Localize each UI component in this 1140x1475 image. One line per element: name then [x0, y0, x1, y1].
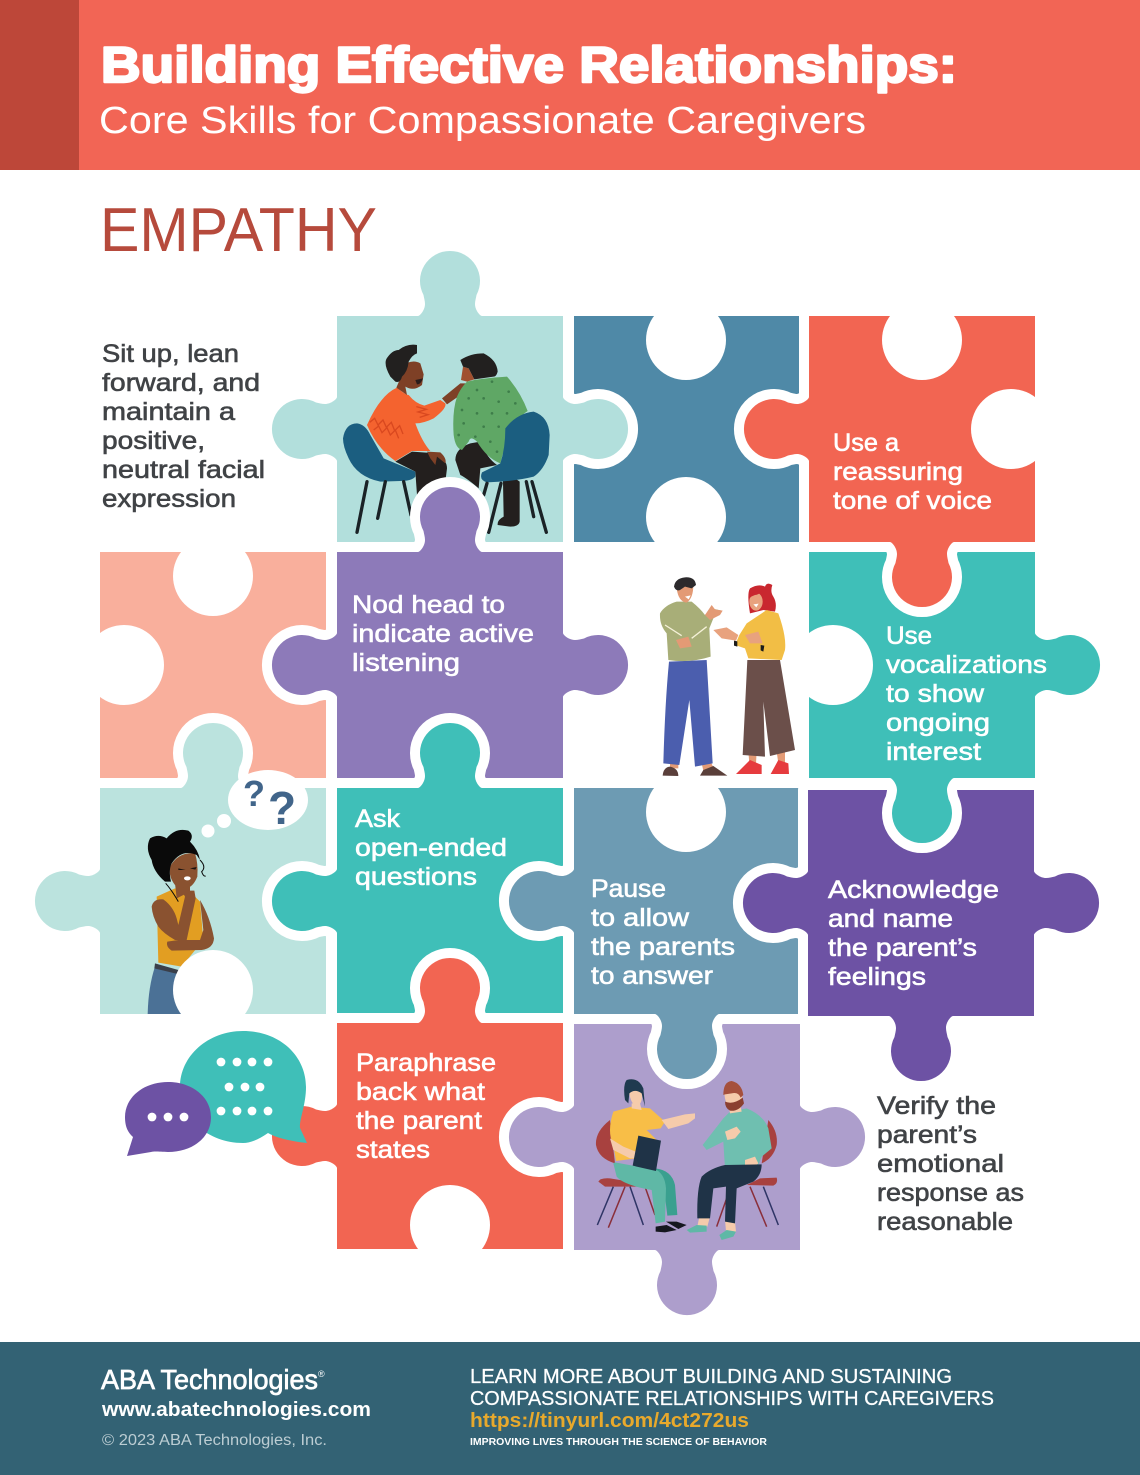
illustration: two people seated, one comforting the other — [343, 345, 550, 532]
puzzle piece: steel blue — [574, 300, 800, 557]
puzzle piece: lavender with illustration — [509, 1024, 865, 1315]
text: verify: emotional — [877, 1150, 1004, 1178]
link: https://tinyurl.com/4ct272us — [470, 1410, 749, 1432]
text: sit up: forward, and — [102, 369, 260, 397]
text: acknowledge: the parent’s — [828, 934, 977, 962]
text: nod head: indicate active — [352, 620, 534, 648]
text: sit up: neutral facial — [102, 456, 265, 484]
text: reassuring tone: reassuring — [833, 458, 963, 486]
logo wordmark: ® — [318, 1369, 325, 1379]
learn more text: LEARN MORE ABOUT BUILDING AND SUSTAINING — [470, 1366, 952, 1388]
puzzle piece: coral, tone of voice — [744, 300, 1051, 607]
copyright: © 2023 ABA Technologies, Inc. — [102, 1432, 327, 1449]
text: acknowledge: Acknowledge — [828, 876, 999, 904]
text: vocalizations: interest — [886, 738, 981, 766]
text: sit up — [102, 340, 265, 513]
text: paraphrase: back what — [356, 1078, 485, 1106]
puzzle piece: mint with illustration — [35, 723, 326, 1030]
puzzle piece: purple, nod head — [272, 487, 628, 778]
text: open-ended questions: Ask — [355, 805, 401, 833]
text: nod head: Nod head to — [352, 591, 505, 619]
subtitle: Core Skills for Compassionate Caregivers — [99, 100, 866, 142]
text: vocalizations: to show — [886, 680, 985, 708]
puzzle piece: coral, paraphrase — [272, 958, 563, 1265]
text: paraphrase: states — [356, 1136, 430, 1164]
text: acknowledge: and name — [828, 905, 953, 933]
text: pause: Pause — [591, 875, 666, 903]
text: pause: to allow — [591, 904, 690, 932]
learn more text: COMPASSIONATE RELATIONSHIPS WITH CAREGIVERS — [470, 1388, 994, 1410]
text: acknowledge — [828, 876, 999, 991]
text: paraphrase — [356, 1049, 496, 1164]
icon: thought bubble with question marks — [202, 770, 308, 838]
heading: empathy: EMPATHY — [100, 196, 377, 265]
puzzle piece: light teal with illustration — [272, 251, 628, 542]
text: vocalizations: ongoing — [886, 709, 990, 737]
text: verify: response as — [877, 1179, 1024, 1207]
illustration: thinking woman — [148, 830, 214, 1014]
text: sit up: positive, — [102, 427, 205, 455]
text: paraphrase: the parent — [356, 1107, 482, 1135]
header banner — [0, 0, 1140, 170]
text: pause — [591, 875, 735, 990]
icon: speech bubbles — [125, 1031, 307, 1156]
icon: thought bubble with question marks: ? — [243, 773, 265, 814]
icon: thought bubble with question marks: ? — [268, 782, 296, 834]
text: vocalizations: vocalizations — [886, 651, 1047, 679]
purple speech bubble — [125, 1082, 211, 1156]
text: sit up: Sit up, lean — [102, 340, 239, 368]
learn more text — [470, 1366, 994, 1410]
text: vocalizations: Use — [886, 622, 932, 650]
title: Building Effective Relationships: — [101, 37, 957, 93]
text: verify: Verify the — [877, 1092, 996, 1120]
text: pause: to answer — [591, 962, 713, 990]
puzzle piece: slate blue, pause — [509, 772, 800, 1079]
puzzle piece: teal, open-ended questions — [272, 723, 563, 1014]
text: verify: parent’s — [877, 1121, 977, 1149]
text: paraphrase: Paraphrase — [356, 1049, 496, 1077]
text: open-ended questions: open-ended — [355, 834, 507, 862]
puzzle piece: salmon — [84, 536, 326, 778]
text: reassuring tone: Use a — [833, 429, 899, 457]
text: nod head — [352, 591, 534, 677]
illustration: counselor with clipboard and seated parent — [596, 1079, 778, 1240]
tagline: IMPROVING LIVES THROUGH THE SCIENCE OF BEHAVIOR — [470, 1437, 768, 1448]
text: pause: the parents — [591, 933, 735, 961]
teal speech bubble — [180, 1031, 307, 1143]
text: reassuring tone: tone of voice — [833, 487, 992, 515]
logo wordmark: ABA Technologies — [101, 1364, 318, 1395]
text: acknowledge: feelings — [828, 963, 926, 991]
text: verify: reasonable — [877, 1208, 1013, 1236]
text: reassuring tone — [833, 429, 992, 515]
text: sit up: maintain a — [102, 398, 235, 426]
footer — [0, 1342, 1140, 1475]
text: sit up: expression — [102, 485, 236, 513]
puzzle piece: teal, vocalizations — [793, 552, 1100, 843]
puzzle piece: dark purple, acknowledge — [743, 790, 1099, 1081]
website: www.abatechnologies.com — [101, 1399, 371, 1421]
text: vocalizations — [886, 622, 1047, 766]
text: nod head: listening — [352, 649, 460, 677]
text: open-ended questions: questions — [355, 863, 477, 891]
text: open-ended questions — [355, 805, 507, 891]
illustration: man and woman talking — [660, 577, 795, 776]
text: verify — [877, 1092, 1024, 1236]
